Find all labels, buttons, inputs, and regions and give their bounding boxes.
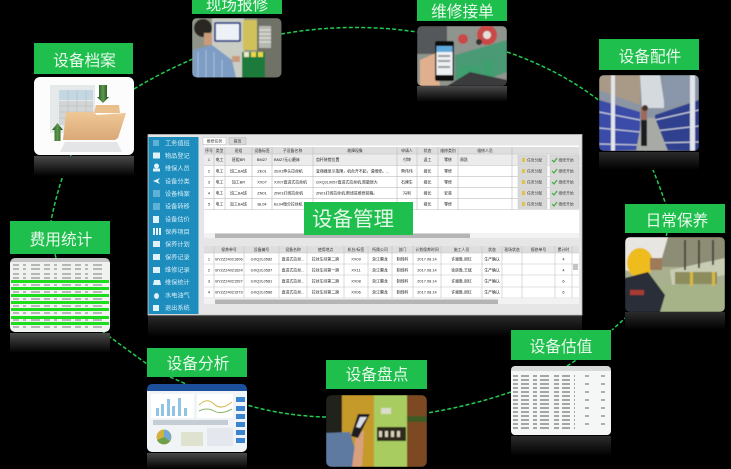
upper repair task table: 电工 <box>216 168 223 174</box>
lower maintenance table: GXQ2L0581 <box>251 278 272 284</box>
lower maintenance table: 2017.08.14 <box>417 268 438 272</box>
label 维修接单: 维修接单 <box>431 3 494 21</box>
upper repair task table: BM27 <box>257 157 267 162</box>
lower maintenance table: 制线科 <box>397 278 408 284</box>
lower maintenance table: 直进式拉丝... <box>282 268 304 272</box>
sidebar navigation: 设备档案 <box>165 190 191 198</box>
sidebar navigation: 水电油气 <box>165 291 190 299</box>
screenshot: cost statistics spreadsheet <box>10 258 110 332</box>
upper repair task table: 熊伟伟 <box>401 168 413 174</box>
upper repair task table: 周凯 <box>460 157 468 162</box>
lower maintenance table: BYZZ24021606 <box>215 256 243 262</box>
lower maintenance table: 2 <box>208 268 210 272</box>
node: 现场报修 <box>192 0 282 78</box>
upper repair task table: 维修类别 <box>440 148 456 153</box>
lower maintenance table: XX06 <box>351 290 361 294</box>
lower maintenance table: GXQ2L0586 <box>251 290 272 294</box>
upper repair task table: 石建生 <box>401 180 413 184</box>
upper repair task table: BL04微分拉丝机 <box>274 202 303 206</box>
main window reflection <box>148 315 582 337</box>
lower maintenance table: 生产确认 <box>484 256 500 262</box>
screenshot: valuation spreadsheet <box>511 366 611 435</box>
lower maintenance table: 许顺胜,闵红 <box>451 278 472 284</box>
task action buttons: 任务分配 <box>527 168 542 174</box>
upper scrollbar <box>204 233 579 238</box>
node: 设备分析 <box>147 348 247 469</box>
icon: folder with document and arrows <box>34 77 134 155</box>
lower maintenance table: BYZZ24021579 <box>215 290 243 294</box>
sidebar navigation: 设备转移 <box>165 203 190 211</box>
upper repair task table: 报长 <box>424 202 431 206</box>
sidebar navigation: 维修记录 <box>165 266 190 274</box>
upper repair task table: 类型 <box>216 148 223 153</box>
node: 设备估值 <box>511 330 611 456</box>
label 费用统计: 费用统计 <box>30 231 93 249</box>
label 设备盘点: 设备盘点 <box>346 365 408 384</box>
lower maintenance table: 2017.08.14 <box>417 290 438 294</box>
upper repair task table: ZN01打线拉丝机 <box>274 190 303 196</box>
window frame <box>148 134 582 315</box>
upper repair task table: 变频器显示故障，机台开不起，请维修。... <box>316 168 389 174</box>
upper repair task table: 报长 <box>424 190 431 196</box>
upper repair task table: 班二BA班 <box>230 168 247 174</box>
lower maintenance table: 计划保养时间 <box>415 247 439 252</box>
lower maintenance table: 4 <box>562 268 565 272</box>
upper repair task table: 加工BR <box>232 180 245 184</box>
task action buttons: 维修开始 <box>558 202 574 206</box>
lower maintenance table: BYZZ24021597 <box>215 278 243 284</box>
lower maintenance table: 许顺胜,闵红 <box>451 256 472 262</box>
lower maintenance table: XX09 <box>351 256 361 262</box>
lower maintenance table: 直进式拉丝... <box>282 290 304 294</box>
upper repair task table: 零修 <box>444 180 452 184</box>
reflection 设备配件 <box>599 152 699 170</box>
sidebar navigation: 设备估价 <box>165 215 190 223</box>
upper repair task table: 序号 <box>205 148 213 153</box>
reflection 设备档案 <box>34 156 134 176</box>
upper repair task table: 维修人员 <box>477 148 493 153</box>
upper repair task table: 2 <box>208 168 210 174</box>
task action buttons: 任务分配 <box>527 158 542 162</box>
upper repair task table: ZE01伸头拉丝机 <box>274 168 303 174</box>
tabs <box>203 138 246 144</box>
lower maintenance table: 使用地点 <box>318 247 333 252</box>
reflection 费用统计 <box>10 333 110 353</box>
label 设备分析: 设备分析 <box>167 355 229 373</box>
lower maintenance table: 制线科 <box>397 268 408 272</box>
lower maintenance table: 制线科 <box>397 256 408 262</box>
upper repair task table: 状态 <box>424 148 431 153</box>
sidebar navigation: 维保人员 <box>165 165 190 173</box>
upper repair task table: ZN01 <box>257 190 267 196</box>
upper repair task table: 报长 <box>424 180 431 184</box>
upper repair task table: 加工BA班 <box>230 202 247 206</box>
dashed connector ring <box>51 27 667 417</box>
lower maintenance table: 状态 <box>488 247 496 252</box>
lower maintenance table: 生产确认 <box>484 278 500 284</box>
lower maintenance table: 3 <box>208 278 210 284</box>
upper repair task table: 5 <box>208 202 210 206</box>
task action buttons: 维修开始 <box>558 190 574 196</box>
lower maintenance table: 保养单号 <box>221 247 237 252</box>
lower maintenance table: 4 <box>208 290 211 294</box>
node: 设备盘点 <box>326 360 427 467</box>
lower maintenance table <box>204 246 579 304</box>
reflection 维修接单 <box>417 86 507 102</box>
label 设备估值: 设备估值 <box>530 338 593 356</box>
node: 日常保养 <box>625 204 725 330</box>
node: 费用统计 <box>10 221 110 353</box>
upper repair task table: XX07直进式拉丝机 <box>274 180 307 184</box>
lower maintenance table: 6 <box>562 290 565 294</box>
upper repair task table: 1 <box>208 157 210 162</box>
label 设备配件: 设备配件 <box>619 48 681 66</box>
reflection 设备估值 <box>511 436 611 456</box>
lower maintenance table: 生产确认 <box>484 268 500 272</box>
lower maintenance table: 4 <box>562 256 565 262</box>
panel: main software window <box>148 134 582 337</box>
lower maintenance table: 拉丝车间第二跨 <box>312 290 339 294</box>
sidebar navigation <box>148 137 198 314</box>
upper repair task table: 班组 <box>235 148 242 153</box>
upper repair task table: 申请人 <box>401 148 413 153</box>
upper repair task table <box>204 146 579 234</box>
upper repair task table: GXQ2L0057直进式拉丝机,离散很大 <box>316 180 378 184</box>
lower maintenance table: 累计时 <box>558 247 569 252</box>
upper repair task table: 安装 <box>444 190 452 196</box>
sidebar navigation: 维保统计 <box>165 279 190 287</box>
sidebar navigation: 工务值班 <box>165 139 190 147</box>
upper repair task table: 齿杆装错位置 <box>316 157 339 162</box>
lower maintenance table: 拉丝车间第二跨 <box>312 278 339 284</box>
sidebar navigation: 保养记录 <box>165 253 190 261</box>
lower maintenance table: 1 <box>208 256 210 262</box>
photo: warehouse shelves <box>599 75 699 151</box>
upper repair task table: 电工 <box>216 157 223 162</box>
lower maintenance table: 施工人员 <box>454 247 469 252</box>
upper repair task table: 子设备名称 <box>283 148 302 153</box>
task action buttons: 任务分配 <box>527 190 542 196</box>
upper repair task table: 电工 <box>216 202 223 206</box>
lower maintenance table: GXQ2L0582 <box>251 256 272 262</box>
lower maintenance table: 拉丝车间第二跨 <box>312 256 339 262</box>
sidebar navigation: 保养计划 <box>165 241 190 249</box>
lower maintenance table: 设备编号 <box>254 247 269 252</box>
photo: worker with tool belt in factory <box>625 237 725 312</box>
lower maintenance table: 直进式拉丝... <box>282 278 304 284</box>
node: 维修接单 <box>417 0 507 102</box>
reflection 设备分析 <box>147 453 247 469</box>
reflection 日常保养 <box>625 312 725 330</box>
lower maintenance table: BYZZ24021624 <box>215 268 243 272</box>
upper repair task table: 班组BR <box>232 157 245 162</box>
lower maintenance table: 浙江腾龙 <box>372 256 388 262</box>
lower maintenance table: 2017.08.14 <box>417 256 438 262</box>
upper repair task table: 电工 <box>216 180 223 184</box>
node: 设备配件 <box>599 39 699 170</box>
upper repair task table: 故障现象 <box>347 148 363 153</box>
tabs: 维修任务 <box>207 138 222 144</box>
lower maintenance table: 许顺胜,闵红 <box>451 290 472 294</box>
upper repair task table: 电工 <box>216 190 223 196</box>
label 设备档案: 设备档案 <box>53 52 116 70</box>
photo: operator at control panel <box>192 18 282 78</box>
upper repair task table: 冯利 <box>403 190 411 196</box>
task action buttons: 维修开始 <box>558 168 574 174</box>
lower maintenance table: 2017.08.14 <box>417 278 438 284</box>
upper repair task table: 报长 <box>424 168 431 174</box>
upper repair task table: 4 <box>208 190 211 196</box>
photo: phone in a workshop <box>417 25 507 86</box>
lower maintenance table: 徐廷胜,王斌 <box>451 268 472 272</box>
lower maintenance table: 机台/标签 <box>348 247 364 252</box>
task action buttons: 任务分配 <box>527 202 542 206</box>
upper repair task table: 返工 <box>424 157 431 162</box>
lower maintenance table: 生产确认 <box>484 290 500 294</box>
lower maintenance table: 浙江腾龙 <box>372 278 388 284</box>
screenshot: analysis dashboard <box>147 384 247 452</box>
lower maintenance table: 浙江腾龙 <box>372 290 388 294</box>
tabs: 首页 <box>234 138 241 144</box>
task action buttons <box>518 156 579 208</box>
lower maintenance table: 浙江腾龙 <box>372 268 388 272</box>
upper repair task table: 付坤 <box>403 157 411 162</box>
upper repair task table: 零修 <box>444 202 452 206</box>
lower maintenance table: 直进式拉丝... <box>282 256 304 262</box>
lower maintenance table: 部门 <box>399 247 406 252</box>
upper repair task table: 班二BA班 <box>230 190 247 196</box>
lower maintenance table: 现场状态 <box>504 247 520 252</box>
upper repair task table: 设备标签 <box>254 148 270 153</box>
upper repair task table: 3 <box>208 180 210 184</box>
lower maintenance table: 6 <box>562 278 565 284</box>
upper repair task table: BL04 <box>257 202 267 206</box>
center title: 设备管理: 设备管理 <box>312 208 394 231</box>
upper repair task table: 零修 <box>444 168 452 174</box>
label 日常保养: 日常保养 <box>646 212 709 230</box>
lower maintenance table: 制线科 <box>397 290 408 294</box>
lower maintenance table: GXQ2L0587 <box>251 268 272 272</box>
lower scrollbar <box>204 299 579 304</box>
photo: handheld scanner inventory <box>326 395 427 467</box>
lower maintenance table: 拉丝车间第一跨 <box>312 268 339 272</box>
sidebar navigation: 设备分类 <box>165 177 190 185</box>
center title: 设备管理 <box>304 202 413 235</box>
task action buttons: 任务分配 <box>527 180 542 184</box>
task action buttons: 维修开始 <box>558 180 574 184</box>
upper repair task table: 零修 <box>444 157 452 162</box>
task action buttons: 维修开始 <box>558 158 574 162</box>
sidebar navigation: 退出系统 <box>165 304 190 312</box>
node: 设备档案 <box>34 43 134 176</box>
upper repair task table: ZE01 <box>257 168 267 174</box>
sidebar navigation: 保养项目 <box>165 228 190 236</box>
upper repair task table: XX07 <box>257 180 267 184</box>
lower maintenance table: XX08 <box>351 278 361 284</box>
upper repair task table: BM27无心磨床 <box>274 157 300 162</box>
lower maintenance table: 设备名称 <box>285 247 301 252</box>
lower maintenance table: XX11 <box>351 268 361 272</box>
lower maintenance table: 报修单号 <box>531 247 546 252</box>
sidebar navigation: 物品登记 <box>165 152 190 160</box>
upper repair task table: ZN01打线拉丝机,断线进维修装箱。 <box>316 190 377 196</box>
lower maintenance table: 所属公司 <box>372 247 388 252</box>
